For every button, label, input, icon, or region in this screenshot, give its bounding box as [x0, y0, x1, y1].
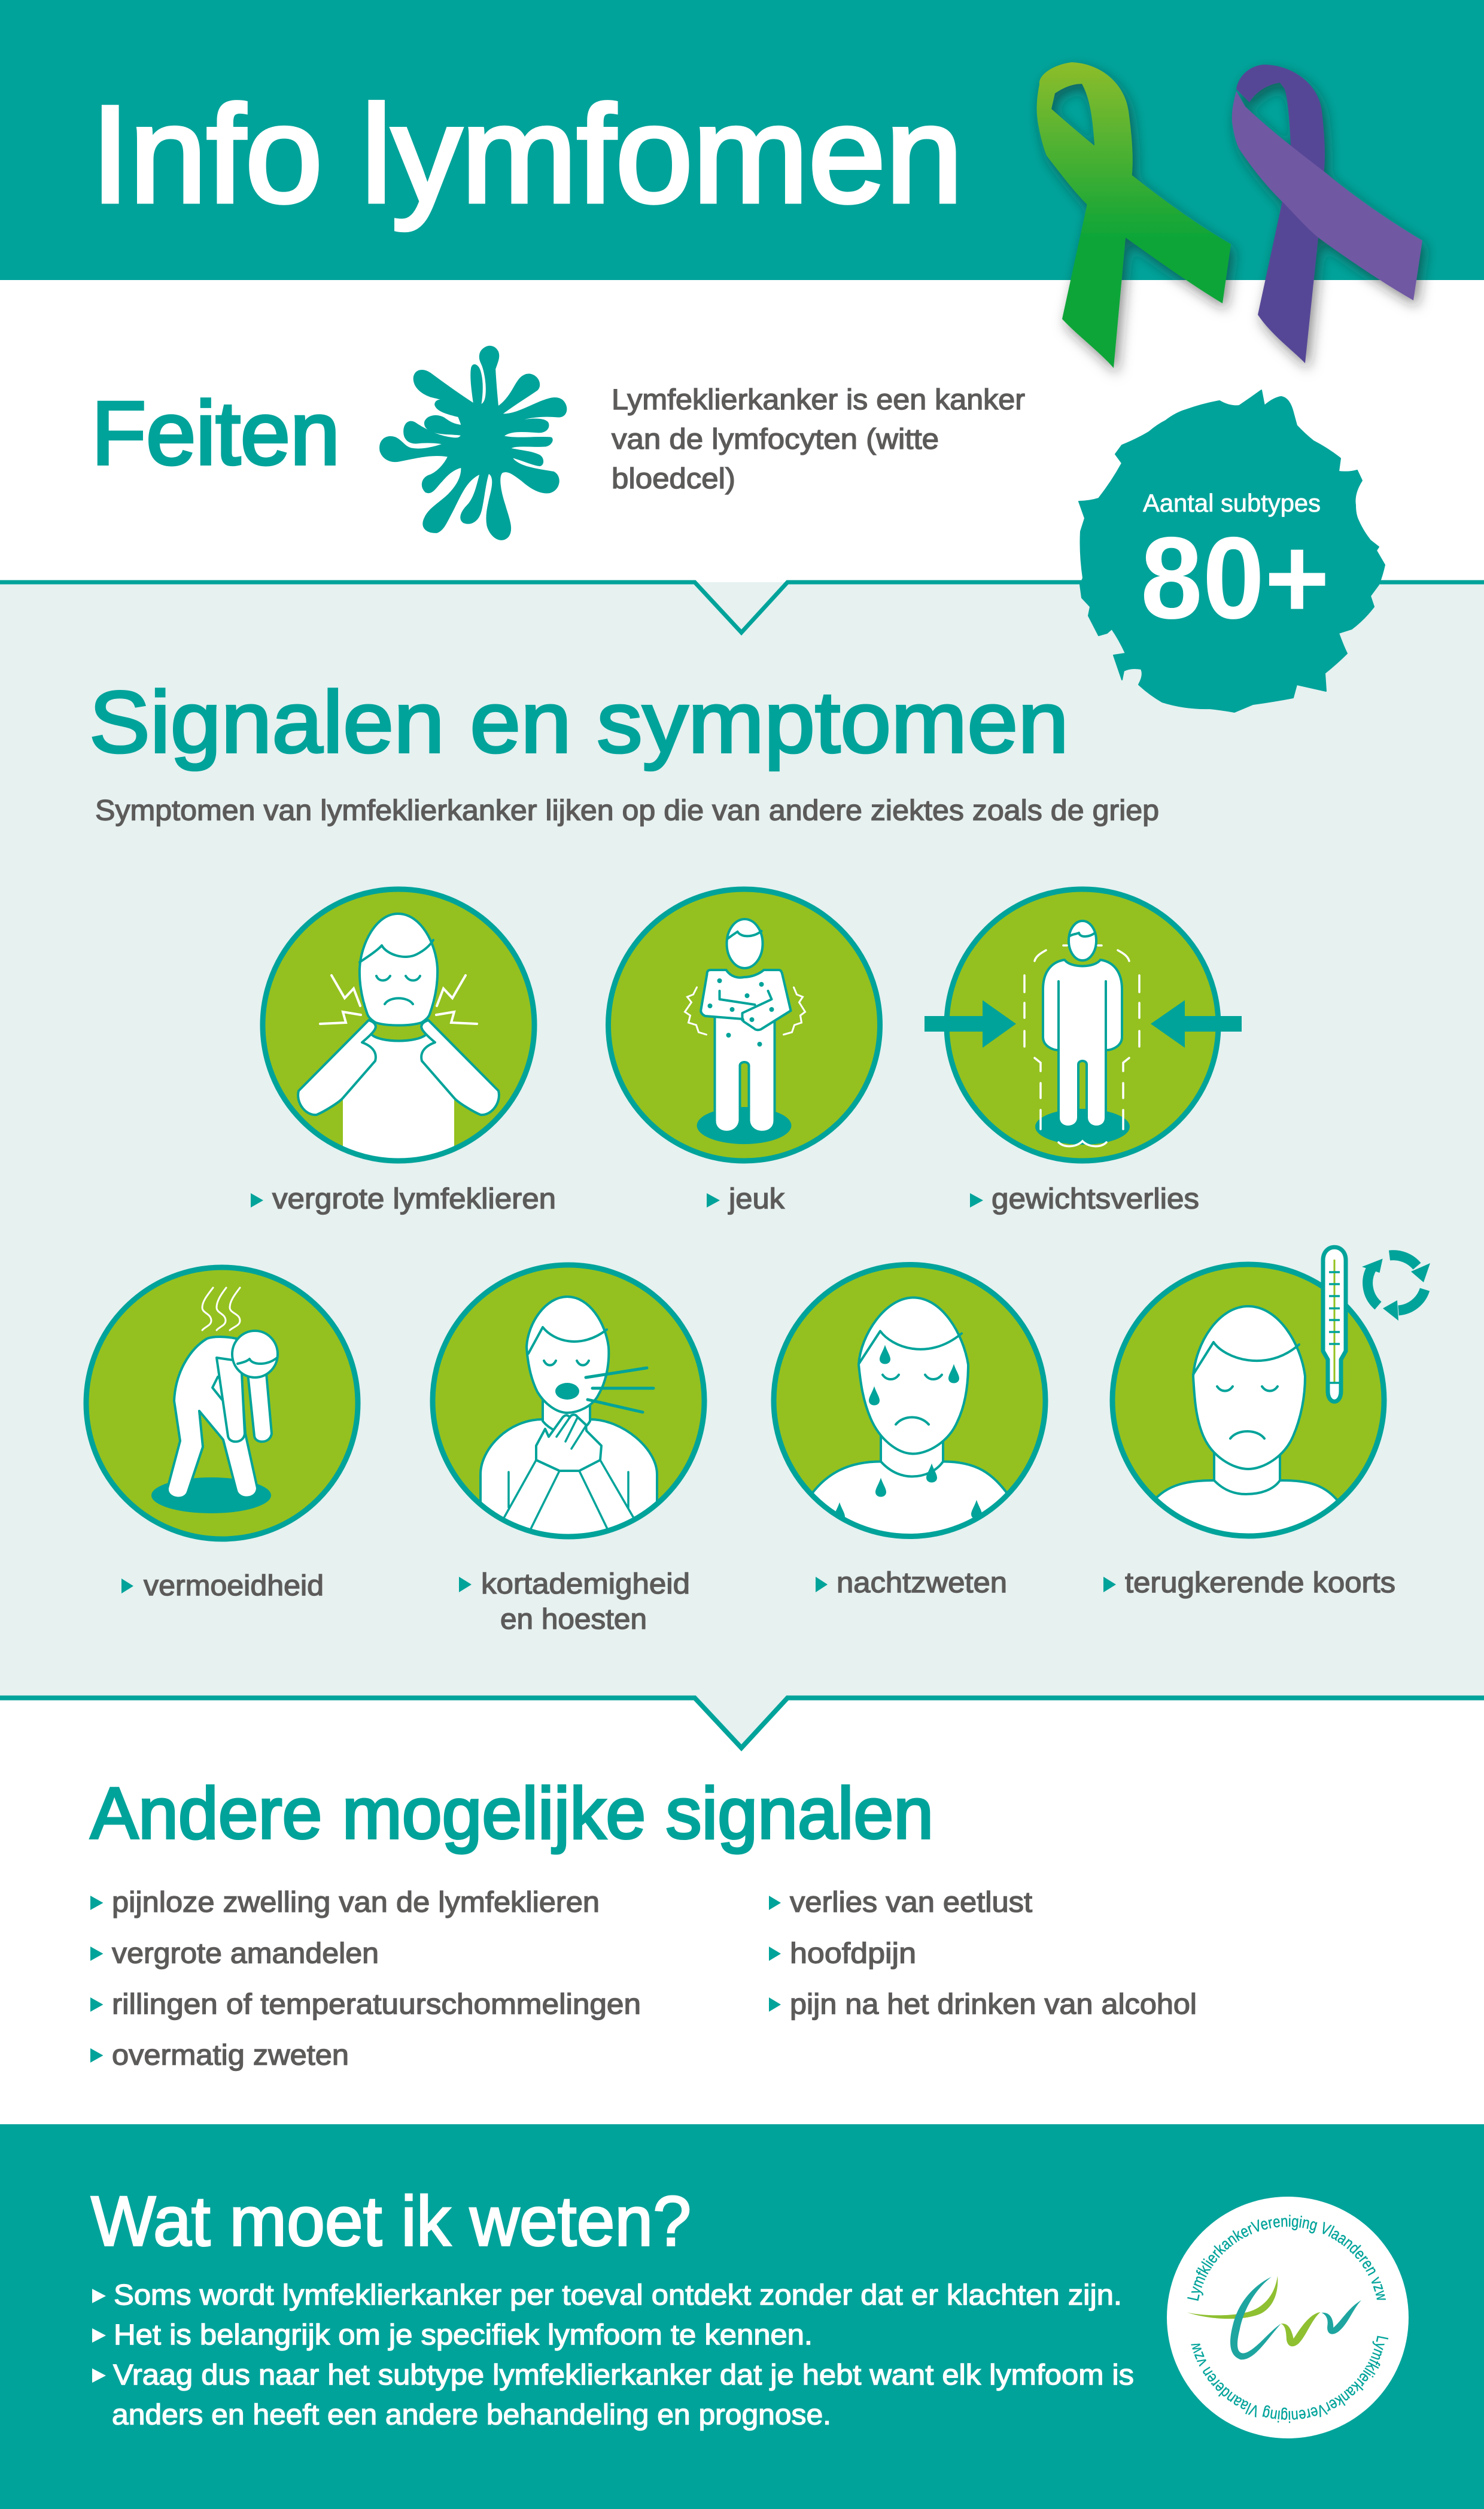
head — [859, 1297, 968, 1454]
heading: Andere mogelijke signalen: Andere mogelijke signalen — [90, 1772, 933, 1854]
pain lightning — [320, 975, 477, 1024]
list: other signals right column: verlies van eetlust — [790, 1887, 1032, 1918]
head — [232, 1331, 278, 1377]
itch marks — [685, 987, 805, 1035]
shoulders — [481, 1419, 657, 1544]
neck — [1214, 1442, 1280, 1494]
panel: header band — [0, 0, 1484, 280]
text: definition: Lymfeklierkanker is een kanker — [612, 384, 1025, 416]
number: 80+: 80+ — [1141, 513, 1330, 643]
text: what to know bullets: anders en heeft een andere behandeling en prognose. — [112, 2399, 831, 2431]
text: definition: van de lymfocyten (witte — [612, 424, 939, 455]
logo mark — [1187, 2276, 1361, 2359]
label: gewichtsverlies: gewichtsverlies — [992, 1184, 1199, 1215]
heat lines — [202, 1288, 240, 1330]
icon: green ribbon — [1037, 62, 1231, 368]
sweat drops — [834, 1345, 982, 1521]
ground shadow — [1035, 1109, 1130, 1145]
list: other signals left column — [90, 1887, 641, 2072]
label: terugkerende koorts: terugkerende koorts — [1125, 1567, 1395, 1599]
torso with crossed arms — [701, 970, 791, 1030]
neck — [881, 1424, 943, 1477]
arrow: squeeze right — [1151, 1000, 1242, 1048]
text: definition: bloedcel) — [612, 463, 735, 495]
symptom circle: nachtzweten — [774, 1265, 1045, 1544]
label: kortademigheid en hoesten: kortademigheid — [481, 1568, 690, 1600]
list: other signals left column: rillingen of temperatuurschommelingen — [112, 1989, 641, 2020]
list: other signals right column: pijn na het drinken van alcohol — [790, 1989, 1197, 2020]
left arm — [298, 1020, 376, 1115]
text: symptoms intro: Symptomen van lymfeklierkanker lijken op die van andere ziektes zoals de griep — [95, 795, 1159, 827]
slim body — [1043, 960, 1122, 1127]
head — [726, 919, 762, 968]
symptom circle: jeuk — [608, 889, 880, 1161]
icon: purple ribbon — [1232, 65, 1422, 363]
legs — [714, 1013, 774, 1132]
dashed former outline — [1024, 945, 1139, 1146]
heading: Wat moet ik weten?: Wat moet ik weten? — [91, 2182, 691, 2261]
list: other signals left column: vergrote amandelen — [112, 1938, 379, 1970]
right arm — [421, 1020, 499, 1115]
symptom circle: kortademigheid — [433, 1265, 704, 1544]
list: other signals right column: hoofdpijn — [790, 1938, 916, 1970]
panel: bottom band — [0, 2124, 1484, 2509]
text: what to know bullets — [92, 2280, 1134, 2431]
list: other signals right column — [769, 1887, 1197, 2020]
ground shadow — [697, 1107, 791, 1144]
head — [527, 1297, 609, 1413]
shoulders — [1152, 1480, 1344, 1544]
rash dots — [707, 978, 774, 1047]
text: what to know bullets: Soms wordt lymfeklierkanker per toeval ontdekt zonder dat er klachten zijn. — [114, 2280, 1122, 2311]
shoulders — [808, 1461, 1011, 1544]
label: jeuk: jeuk — [728, 1184, 785, 1215]
head — [360, 914, 437, 1026]
title: Info lymfomen — [91, 77, 963, 231]
head — [1069, 921, 1096, 960]
heading: Signalen en symptomen: Signalen en symptomen — [89, 673, 1069, 771]
label: vergrote lymfeklieren: vergrote lymfeklieren — [272, 1184, 556, 1215]
text: what to know bullets: Vraag dus naar het subtype lymfeklierkanker dat je hebt want elk lymfoom is — [113, 2359, 1134, 2391]
heading: Feiten: Feiten — [92, 383, 340, 483]
list: other signals left column: pijnloze zwelling van de lymfeklieren — [112, 1887, 600, 1918]
arms — [217, 1358, 245, 1441]
label: kortademigheid en hoesten — [459, 1568, 690, 1635]
logo text top: LymfklierkankerVereniging Vlaanderen vzw — [1187, 2215, 1386, 2301]
icon: lymphocyte splash — [381, 346, 566, 539]
callout: 80+ subtypes blob — [1079, 390, 1385, 712]
logo text bottom: LymfklierkankerVereniging Vlaanderen vzw — [1191, 2336, 1388, 2423]
arrow: squeeze left — [925, 1000, 1016, 1048]
head — [1193, 1306, 1305, 1469]
icon: thermometer — [1323, 1247, 1346, 1401]
symptom circle: vermoeidheid — [86, 1267, 358, 1539]
logo: LymfklierkankerVereniging Vlaanderen — [1167, 2197, 1409, 2438]
list: other signals left column: overmatig zweten — [112, 2039, 349, 2072]
chest — [343, 1035, 454, 1169]
symptom circle: vergrote lymfeklieren — [263, 889, 534, 1169]
icon: recurrence arrows — [1362, 1255, 1430, 1321]
label: jeuk — [707, 1184, 785, 1215]
text: definition — [612, 384, 1025, 495]
cough lines — [586, 1368, 653, 1412]
hands — [536, 1415, 601, 1471]
ground shadow — [151, 1477, 271, 1513]
panel: symptoms background with notch — [0, 582, 1484, 1748]
symptom circle: terugkerende koorts — [1112, 1264, 1384, 1544]
label: kortademigheid en hoesten: en hoesten — [500, 1604, 647, 1635]
open mouth — [555, 1383, 579, 1400]
neck — [543, 1401, 590, 1434]
label: Aantal subtypes: Aantal subtypes — [1143, 489, 1321, 517]
symptom circle: gewichtsverlies — [947, 889, 1218, 1161]
label: nachtzweten: nachtzweten — [837, 1567, 1007, 1599]
text: what to know bullets: Het is belangrijk om je specifiek lymfoom te kennen. — [114, 2319, 813, 2351]
label: vermoeidheid: vermoeidheid — [144, 1570, 324, 1602]
bent body — [168, 1337, 257, 1498]
